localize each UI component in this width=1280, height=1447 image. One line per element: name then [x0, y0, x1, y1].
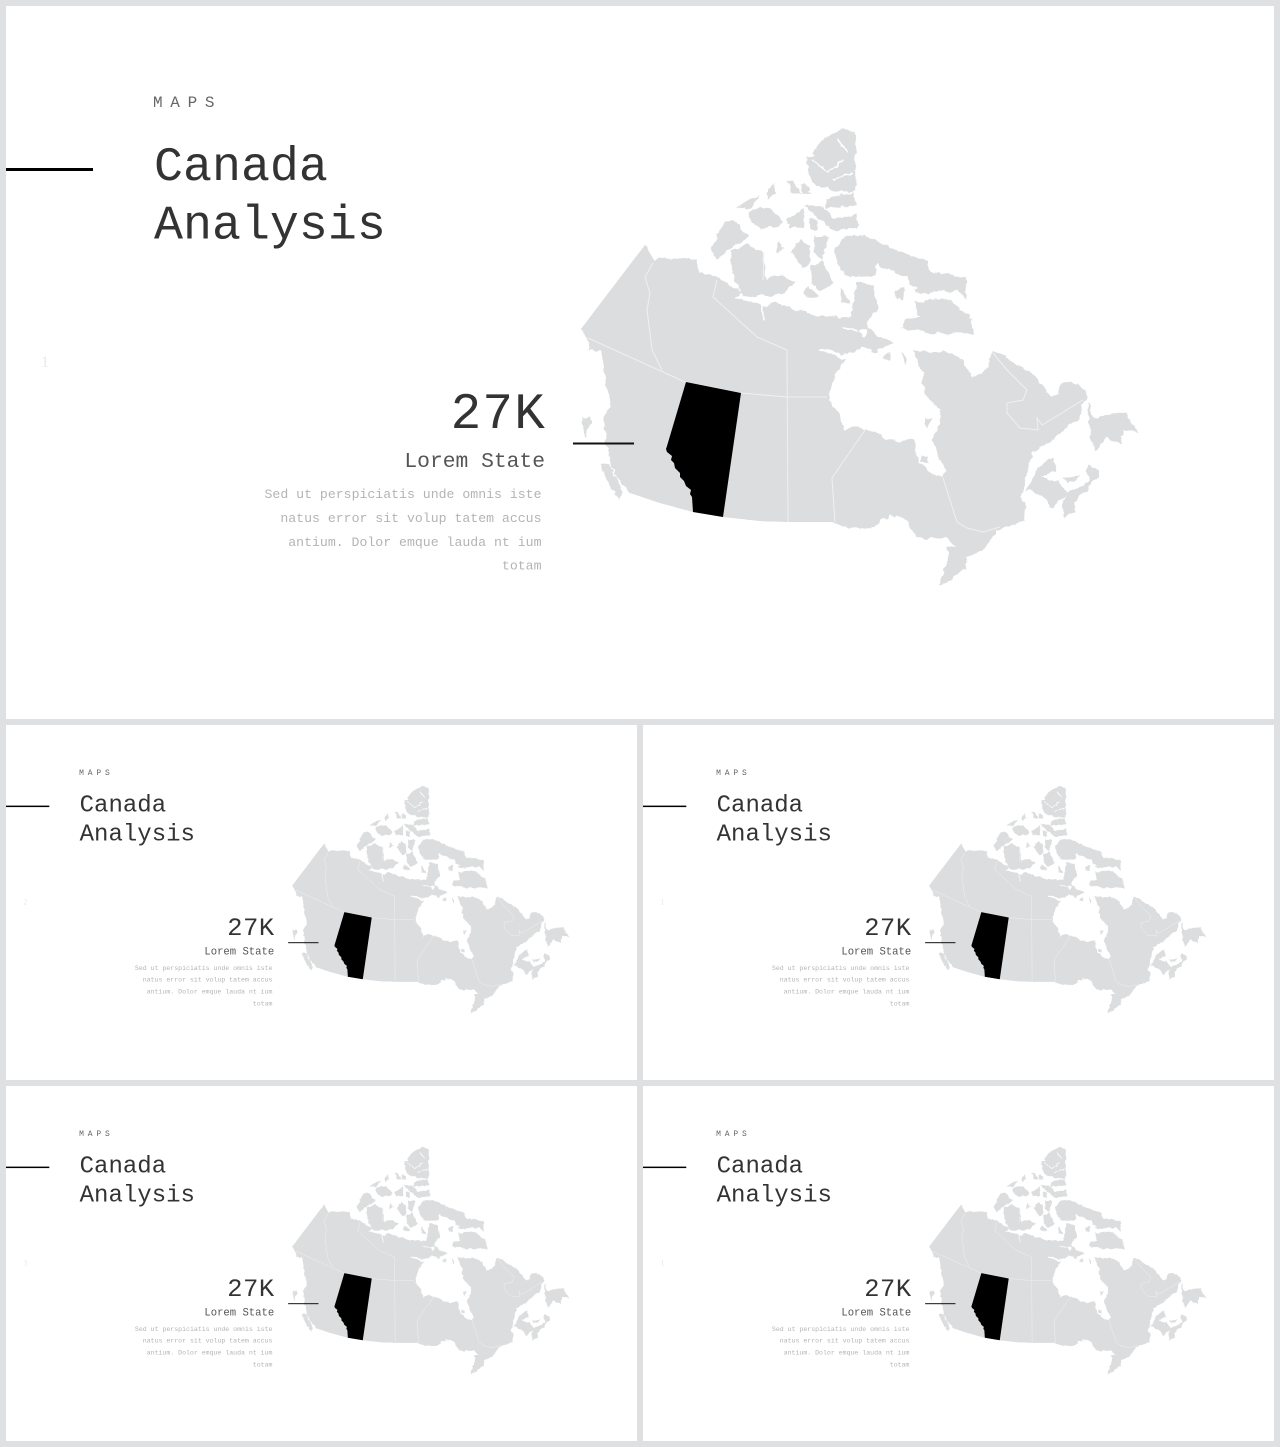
title: Canada: [717, 1154, 803, 1181]
stat label: Lorem State: [404, 450, 545, 474]
description: Sed ut perspiciatis unde omnis iste: [265, 487, 542, 502]
description: natus error sit volup tatem accus: [143, 977, 273, 984]
title: Canada: [80, 793, 166, 820]
description: totam: [253, 1000, 273, 1007]
panel: slide 3: [643, 725, 1274, 1080]
stat value: 27K: [227, 1275, 275, 1304]
stat label: Lorem State: [204, 1307, 274, 1319]
description: antium. Dolor emque lauda nt ium: [147, 989, 273, 996]
panel: slide 2: [6, 725, 637, 1080]
eyebrow label: MAPS: [716, 1130, 751, 1139]
stat value: 27K: [227, 914, 275, 943]
description: antium. Dolor emque lauda nt ium: [147, 1350, 273, 1357]
stat value: 27K: [864, 914, 912, 943]
description: natus error sit volup tatem accus: [780, 1338, 910, 1345]
description: totam: [890, 1000, 910, 1007]
eyebrow label: MAPS: [716, 769, 751, 778]
stat label: Lorem State: [204, 946, 274, 958]
description: antium. Dolor emque lauda nt ium: [784, 1350, 910, 1357]
description: natus error sit volup tatem accus: [780, 977, 910, 984]
map of Canada: [292, 787, 569, 1013]
title: Canada: [154, 140, 328, 195]
connector line: [573, 442, 634, 444]
heading rule: [6, 168, 93, 171]
description: Sed ut perspiciatis unde omnis iste: [772, 1326, 910, 1333]
description: Sed ut perspiciatis unde omnis iste: [772, 965, 910, 972]
eyebrow label: MAPS: [79, 1130, 114, 1139]
title: Canada: [717, 793, 803, 820]
stat label: Lorem State: [841, 946, 911, 958]
panel: slide 4: [6, 1086, 637, 1441]
heading rule: [643, 806, 686, 807]
map of Canada: [929, 787, 1206, 1013]
heading rule: [643, 1167, 686, 1168]
panel: main slide: [6, 6, 1274, 719]
panel: slide 5: [643, 1086, 1274, 1441]
slide number: 1: [660, 898, 664, 907]
slide number: 2: [23, 898, 27, 907]
stat label: Lorem State: [841, 1307, 911, 1319]
title: Analysis: [717, 822, 832, 849]
description: natus error sit volup tatem accus: [143, 1338, 273, 1345]
stat value: 27K: [451, 387, 546, 444]
slide number: 1: [41, 354, 49, 371]
description: Sed ut perspiciatis unde omnis iste: [135, 965, 273, 972]
slide number: 3: [23, 1259, 27, 1268]
map of Canada: [929, 1148, 1206, 1374]
slide number: 1: [660, 1259, 664, 1268]
description: natus error sit volup tatem accus: [280, 511, 542, 526]
heading rule: [6, 1167, 49, 1168]
description: totam: [890, 1361, 910, 1368]
title: Analysis: [80, 822, 195, 849]
description: totam: [253, 1361, 273, 1368]
connector line: [925, 1302, 955, 1305]
connector line: [925, 941, 955, 944]
description: Sed ut perspiciatis unde omnis iste: [135, 1326, 273, 1333]
connector line: [288, 1302, 318, 1305]
description: totam: [502, 558, 542, 574]
title: Analysis: [80, 1183, 195, 1210]
title: Analysis: [154, 198, 386, 254]
title: Analysis: [717, 1183, 832, 1210]
stat value: 27K: [864, 1275, 912, 1304]
title: Canada: [80, 1154, 166, 1181]
eyebrow label: MAPS: [79, 769, 114, 778]
connector line: [288, 941, 318, 944]
heading rule: [6, 806, 49, 807]
map of Canada: [292, 1148, 569, 1374]
description: antium. Dolor emque lauda nt ium: [784, 989, 910, 996]
eyebrow label: MAPS: [153, 94, 222, 112]
map of Canada: [581, 130, 1137, 585]
description: antium. Dolor emque lauda nt ium: [288, 535, 542, 550]
